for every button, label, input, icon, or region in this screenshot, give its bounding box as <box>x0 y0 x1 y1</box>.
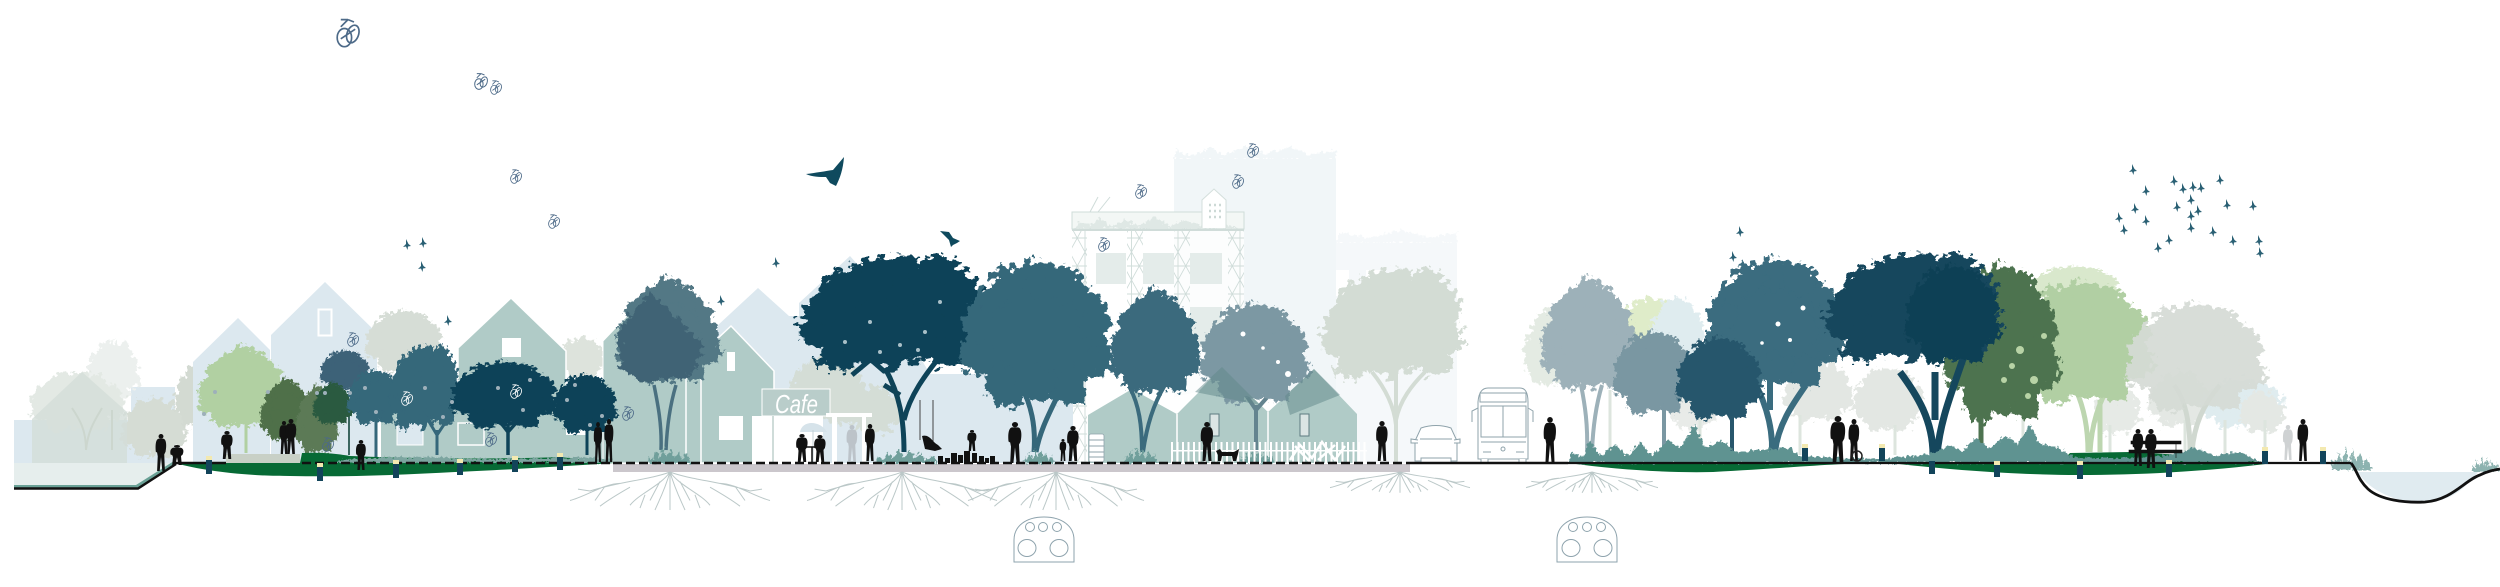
teal house row with white gable gaps <box>1088 367 1357 463</box>
pale house, far left <box>32 372 127 463</box>
tree: dark teal small, right <box>1676 337 1762 455</box>
pale blue house row, left <box>193 282 377 463</box>
large bird, top centre <box>806 157 844 186</box>
birds <box>403 164 2264 326</box>
tree: olive <box>260 378 338 455</box>
pale trees behind right park <box>1524 296 2284 434</box>
dog <box>1216 449 1239 461</box>
bees <box>323 20 1260 451</box>
striped bin <box>1089 434 1104 462</box>
tree: grey teal <box>1200 303 1309 452</box>
tree: grey blue, right <box>1541 277 1638 452</box>
bollard lights <box>206 444 2326 481</box>
low teal house band <box>381 408 634 463</box>
utility tunnel right <box>1557 517 1617 562</box>
tree: gable-front teal tree <box>616 277 721 450</box>
tree: large navy, right <box>1826 253 2000 455</box>
car outline <box>1411 426 1460 462</box>
tree: large teal <box>960 260 1113 452</box>
left bank ground <box>14 461 176 488</box>
white picket fence <box>1171 442 1367 462</box>
meadow planting, right <box>1568 425 2262 463</box>
tree: pale grey, right <box>2126 303 2265 452</box>
pale trunks, left <box>72 408 204 450</box>
pale trees behind cafe <box>790 355 900 434</box>
tree: light green, right <box>2011 266 2153 452</box>
wheelchair <box>1852 451 1862 461</box>
house gable overlay on grey tree <box>1195 367 1340 415</box>
green mound, right <box>1568 463 2273 475</box>
tree: dark small <box>553 374 617 455</box>
cafe table and chairs <box>805 447 820 463</box>
ground lines <box>175 462 2351 464</box>
pale blue houses, centre <box>717 256 1073 463</box>
tree: teal, right <box>1705 258 1845 452</box>
swing <box>920 400 942 451</box>
pale trunks, right <box>1610 390 2265 455</box>
tree roots <box>570 472 1658 510</box>
cafe front: Cafe <box>775 389 818 419</box>
bus outline <box>1472 388 1533 463</box>
tree: olive, right <box>1944 264 2059 452</box>
pavement slab <box>613 464 1410 472</box>
scaffold building with roof garden <box>1072 189 1244 463</box>
river bank tufts <box>2330 447 2500 471</box>
bench <box>2129 441 2182 458</box>
pale background trees, left <box>30 337 606 457</box>
beige planter block <box>226 454 300 463</box>
fruit dots on left trees <box>202 378 604 427</box>
river <box>2351 463 2500 502</box>
tree: navy top <box>320 350 370 392</box>
tree: teal small <box>347 370 403 460</box>
teal cafe house <box>701 326 774 463</box>
tree: teal medium <box>389 345 459 455</box>
shrub tufts along street <box>647 447 1275 463</box>
pale tree behind left houses <box>365 310 443 371</box>
green mound, left <box>175 453 614 476</box>
tree: light green <box>198 345 289 453</box>
far pale low building <box>1336 230 1457 463</box>
teal house, left <box>458 298 566 463</box>
tree: mid teal <box>1110 288 1201 452</box>
pale roadside tree <box>1322 268 1463 463</box>
stepping blocks <box>938 451 995 463</box>
tree: dark wide <box>450 361 558 455</box>
medium bird <box>940 231 960 247</box>
tree: big dark oak <box>800 255 986 452</box>
teal house with gable behind tree <box>603 292 701 463</box>
far pale tall building <box>1174 146 1336 463</box>
left pale water-side backdrop <box>14 387 175 463</box>
utility tunnel left <box>1014 517 1074 562</box>
people <box>156 416 2308 471</box>
tree: dark green <box>313 382 353 455</box>
cafe front <box>752 389 872 463</box>
tree: slate, right <box>1613 331 1695 452</box>
tree row, left park <box>198 345 617 460</box>
